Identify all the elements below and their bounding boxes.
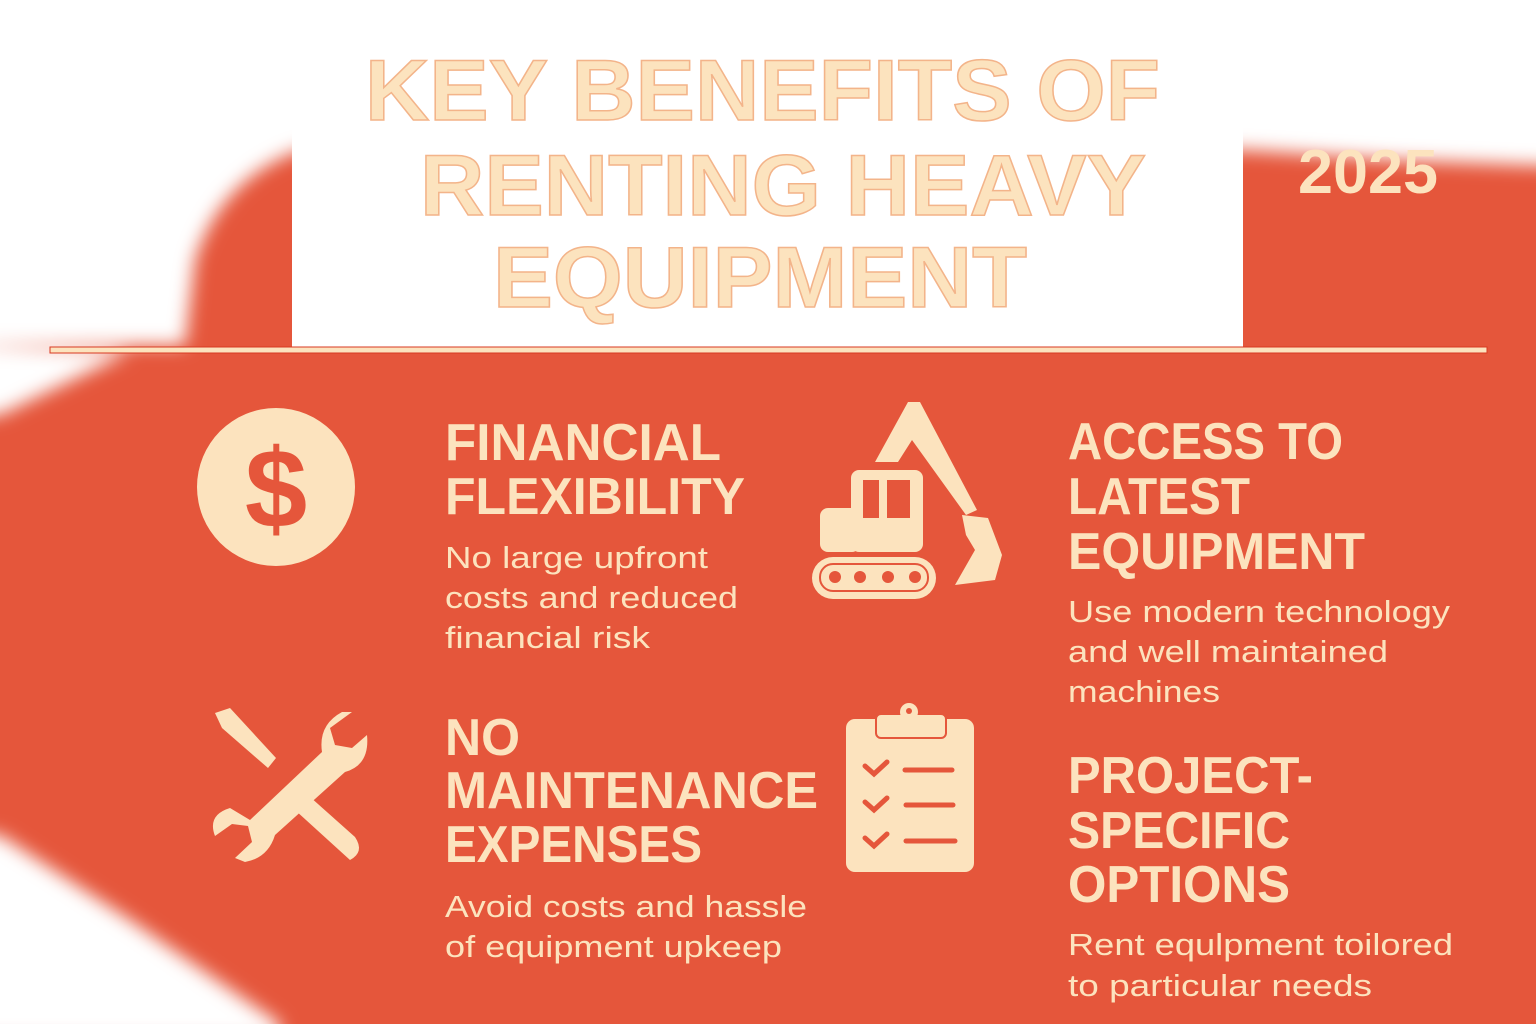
- panel: project-specific options: [1068, 747, 1453, 1003]
- panel: access to latest equipment: machines: [1068, 674, 1220, 709]
- panel: no maintenance expenses: EXPENSES: [445, 816, 702, 874]
- panel: project-specific options: to particular needs: [1068, 968, 1372, 1003]
- year: 2025: [1298, 138, 1438, 207]
- title: EQUIPMENT: [493, 230, 1027, 326]
- panel: access to latest equipment: and well maintained: [1068, 634, 1388, 669]
- title: [365, 43, 1160, 326]
- panel: no maintenance expenses: NO: [445, 709, 520, 767]
- divider: [50, 347, 1487, 353]
- panel: no maintenance expenses: [445, 709, 818, 964]
- panel: access to latest equipment: EQUIPMENT: [1068, 523, 1365, 581]
- panel: no maintenance expenses: Avoid costs and hassle: [445, 889, 807, 924]
- title: RENTING HEAVY: [420, 138, 1146, 234]
- icon: clipboard: [846, 703, 974, 872]
- title panel: [292, 0, 1243, 347]
- panel: financial flexibility: No large upfront: [445, 540, 708, 575]
- panel: project-specific options: SPECIFIC: [1068, 802, 1290, 860]
- panel: financial flexibility: FINANCIAL: [445, 414, 721, 472]
- panel: project-specific options: Rent equlpment toilored: [1068, 927, 1453, 962]
- icon: excavator: [812, 402, 1002, 599]
- panel: no maintenance expenses: MAINTENANCE: [445, 762, 818, 820]
- panel: project-specific options: OPTIONS: [1068, 856, 1290, 914]
- panel: project-specific options: PROJECT-: [1068, 747, 1313, 805]
- panel: financial flexibility: financial risk: [445, 620, 651, 655]
- panel: financial flexibility: FLEXIBILITY: [445, 468, 745, 526]
- panel: access to latest equipment: LATEST: [1068, 468, 1250, 526]
- icon: dollar: $: [245, 426, 307, 551]
- panel: financial flexibility: costs and reduced: [445, 580, 738, 615]
- panel: access to latest equipment: [1068, 413, 1451, 709]
- icon: dollar: [197, 408, 355, 566]
- icon: tools: [213, 708, 367, 862]
- panel: financial flexibility: [445, 414, 745, 655]
- panel: access to latest equipment: Use modern technology: [1068, 594, 1451, 629]
- title: KEY BENEFITS OF: [365, 43, 1160, 139]
- panel: access to latest equipment: ACCESS TO: [1068, 413, 1343, 471]
- panel: no maintenance expenses: of equipment upkeep: [445, 929, 782, 964]
